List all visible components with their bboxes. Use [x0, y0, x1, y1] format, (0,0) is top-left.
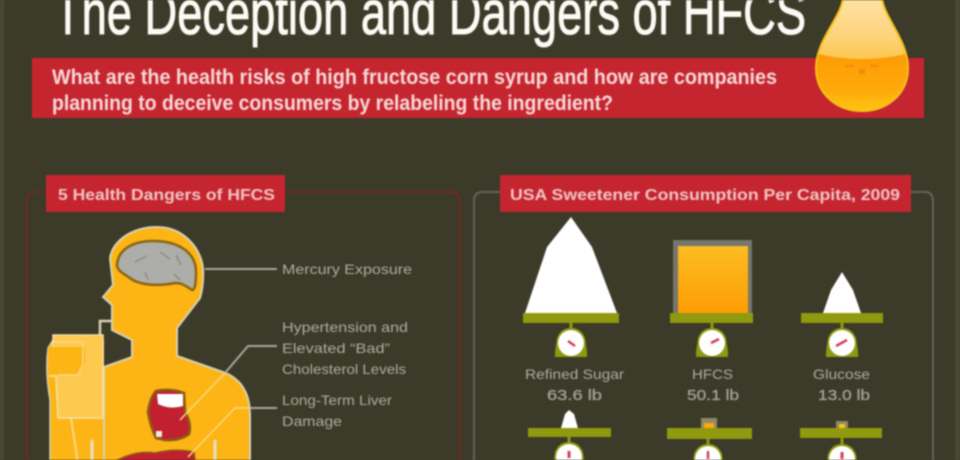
- scale: HFCS: [670, 240, 753, 404]
- heading: health dangers: 5 Health Dangers of HFCS: [58, 187, 275, 204]
- icon: syrup drop: [810, 0, 914, 115]
- callout: liver damage: Long-Term Liver: [282, 392, 392, 408]
- straw: [100, 321, 112, 338]
- scale: refined sugar: [523, 217, 624, 404]
- subtitle banner: planning to deceive consumers by relabeling the ingredient?: [52, 92, 613, 115]
- arm behind cup: [47, 340, 120, 460]
- body illustration: [47, 227, 250, 460]
- subtitle banner: [32, 58, 924, 118]
- callout: liver damage: [188, 392, 392, 457]
- scale: refined sugar: 63.6 lb: [547, 387, 602, 404]
- panel: sweetener consumption: [474, 175, 933, 460]
- callout: hypertension: Hypertension and: [282, 319, 408, 335]
- callout: hypertension: Elevated “Bad”: [282, 340, 390, 356]
- scale: tiny syrup jar: [800, 421, 882, 460]
- liver: [114, 450, 196, 460]
- subtitle banner: What are the health risks of high fructose corn syrup and how are companies: [52, 66, 777, 89]
- scale: refined sugar: Refined Sugar: [525, 366, 624, 382]
- arm gaps: [92, 440, 215, 460]
- panel border: sweetener: [474, 192, 933, 460]
- panel border: health dangers: [27, 192, 460, 460]
- body silhouette: [103, 227, 250, 460]
- scale: glucose: Glucose: [813, 366, 870, 382]
- scale: HFCS: HFCS: [692, 366, 733, 382]
- heading: health dangers: [46, 175, 285, 212]
- heart: [148, 390, 190, 440]
- heading: sweetener: USA Sweetener Consumption Per Capita, 2009: [510, 187, 900, 204]
- scale: small pile: [528, 410, 611, 460]
- dark gap between neck and cup: [104, 338, 135, 367]
- scale: small syrup jar: [667, 418, 752, 460]
- callout: mercury exposure: Mercury Exposure: [282, 261, 412, 277]
- callout: hypertension: [180, 319, 408, 420]
- callout: liver damage: Damage: [282, 413, 342, 429]
- callout: hypertension: Cholesterol Levels: [282, 361, 406, 377]
- scale: glucose: [801, 272, 883, 404]
- heading: sweetener: [500, 175, 911, 212]
- scale: HFCS: 50.1 lb: [687, 387, 739, 404]
- scale: glucose: 13.0 lb: [818, 387, 870, 404]
- brain: [117, 241, 196, 290]
- cup: [48, 335, 103, 460]
- panel: 5 health dangers: [27, 175, 460, 460]
